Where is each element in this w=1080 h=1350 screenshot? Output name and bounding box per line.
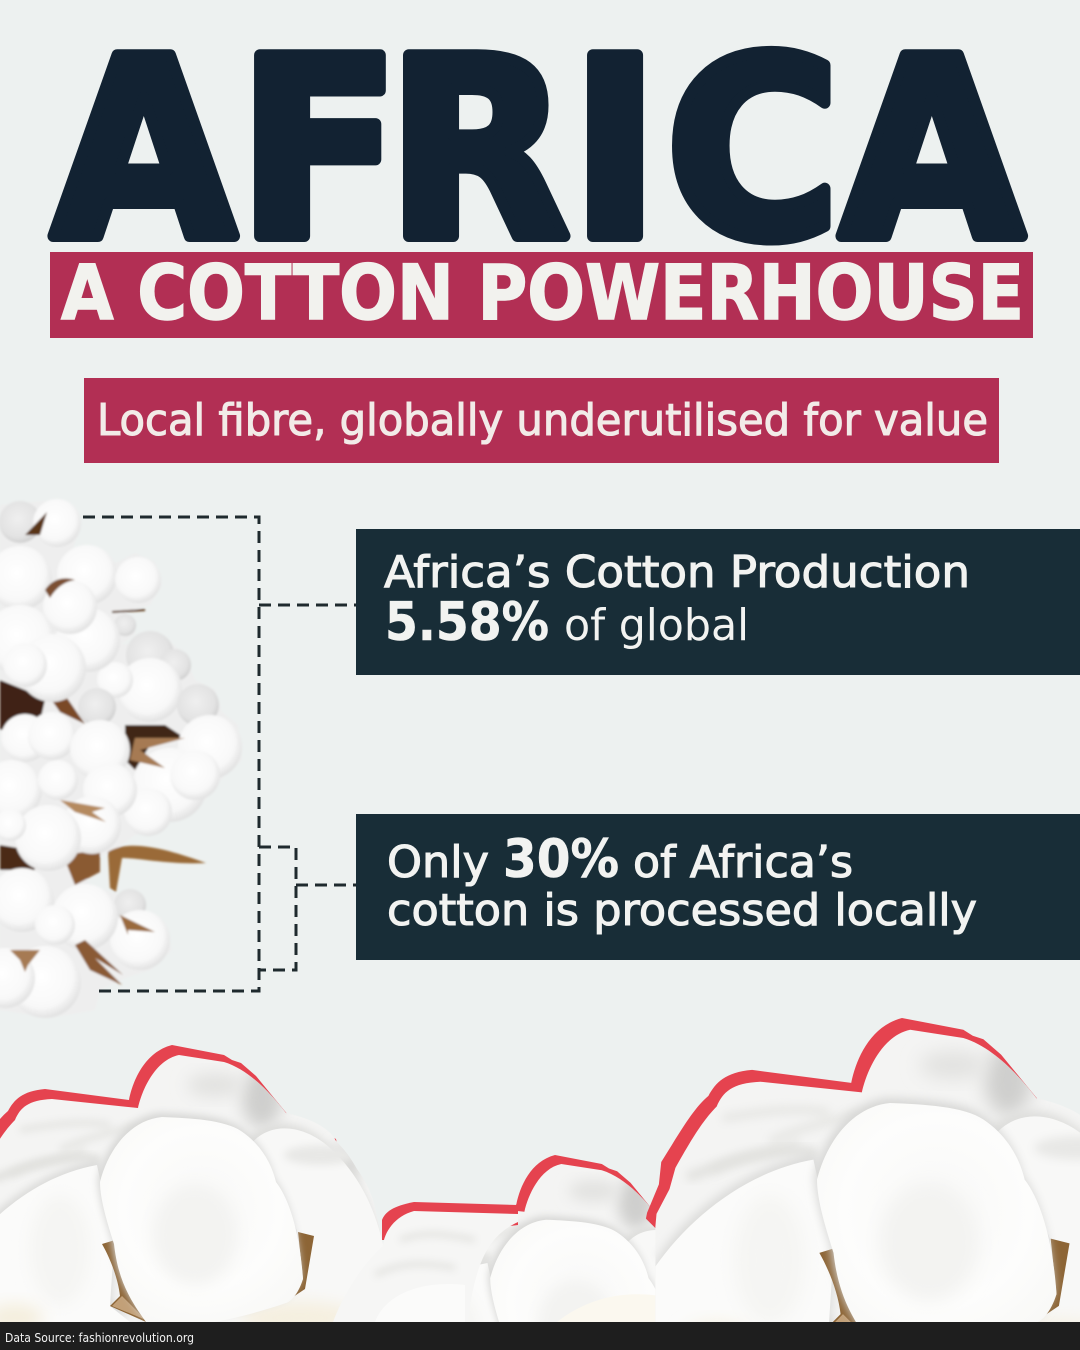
title: AFRICA: AFRICA	[52, 7, 1024, 295]
tagline banner: Local fibre, globally underutilised for value	[97, 395, 988, 446]
connector: dashed brackets	[83, 517, 356, 991]
illustration: left cotton boll	[0, 1045, 383, 1334]
stat panel: production share: Africa’s Cotton Production	[384, 547, 970, 598]
stat panel: local processing: cotton is processed locally	[387, 885, 977, 936]
stat panel: production share: 5.58%	[385, 592, 549, 653]
illustration: right cotton boll	[646, 1018, 1080, 1350]
footer: data source	[0, 1322, 1080, 1350]
stat panel: local processing: 30%	[503, 829, 619, 890]
illustration: middle cotton boll	[468, 1155, 656, 1322]
tagline banner	[84, 378, 999, 463]
stat panel: production share: of global	[564, 600, 749, 651]
footer: data source: Data Source: fashionrevolution.org	[5, 1331, 194, 1345]
stat panel: production share	[356, 529, 1080, 675]
stat panel: local processing	[356, 814, 1080, 960]
illustration: cotton plant	[0, 499, 242, 1018]
illustration: middle boll lower lobes	[333, 1202, 670, 1322]
stat panel: local processing: Only	[387, 837, 489, 888]
stat panel: local processing: of Africa’s	[633, 837, 853, 888]
